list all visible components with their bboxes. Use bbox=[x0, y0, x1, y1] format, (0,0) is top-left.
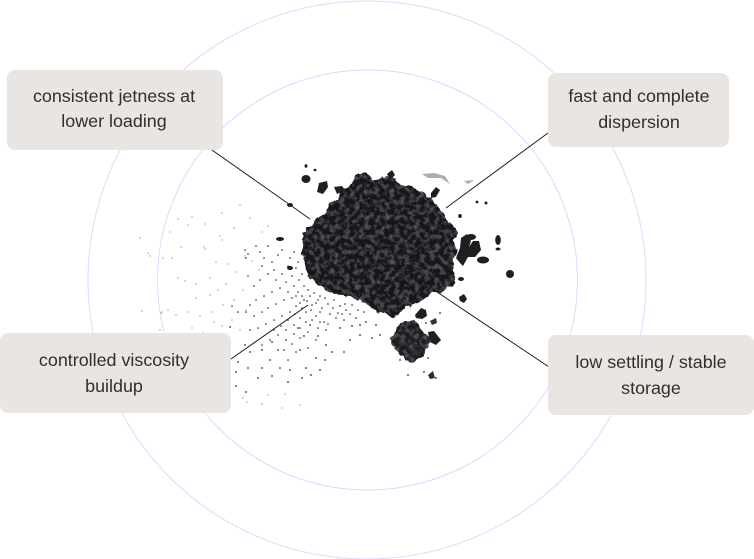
scattered powder specks bbox=[140, 205, 440, 408]
black powder pile bbox=[276, 164, 514, 379]
detached lump bbox=[391, 320, 430, 363]
label: fast dispersion bbox=[548, 73, 729, 147]
label: controlled viscosity: buildup bbox=[85, 376, 143, 396]
connector: top left bbox=[212, 150, 310, 219]
label: consistent jetness bbox=[7, 70, 223, 150]
main pile mass bbox=[302, 174, 459, 318]
connector: bottom left bbox=[231, 305, 308, 359]
label: low settling: storage bbox=[621, 378, 681, 398]
inner ring bbox=[158, 70, 578, 490]
outer ring bbox=[88, 1, 646, 559]
label: fast dispersion: dispersion bbox=[598, 112, 680, 132]
connector: bottom right bbox=[434, 290, 549, 367]
label: controlled viscosity: controlled viscosity bbox=[39, 350, 189, 370]
label: fast dispersion: fast and complete bbox=[568, 86, 710, 106]
label: consistent jetness: lower loading bbox=[61, 111, 167, 131]
label: low settling: low settling / stable bbox=[575, 352, 727, 372]
label: controlled viscosity bbox=[0, 333, 231, 413]
connector: top right bbox=[446, 133, 548, 208]
label: consistent jetness: consistent jetness at bbox=[33, 86, 195, 106]
dusty trace top right bbox=[422, 173, 474, 184]
label: low settling bbox=[548, 335, 754, 415]
small chunks around pile bbox=[276, 164, 514, 379]
